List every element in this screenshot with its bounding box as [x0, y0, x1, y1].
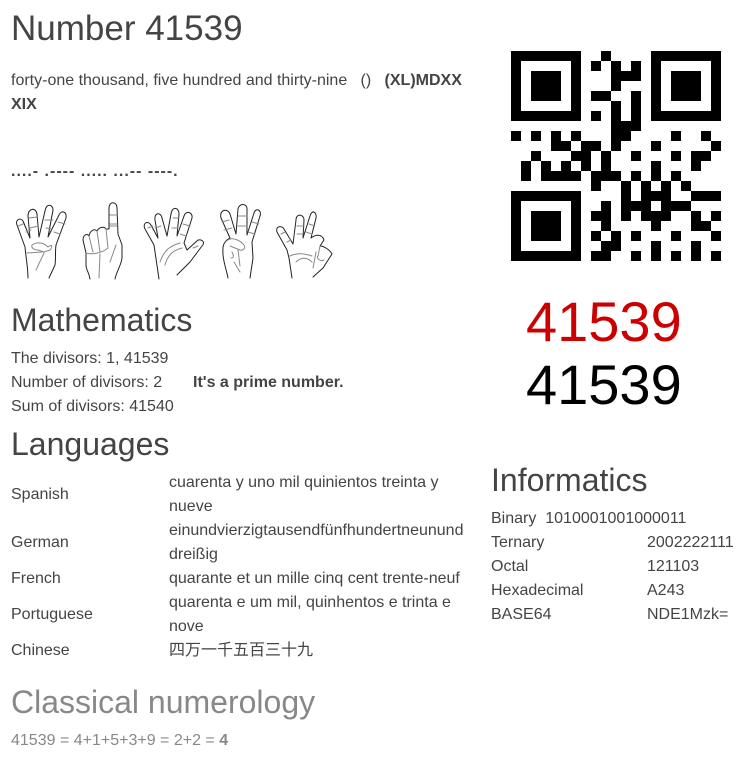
- Spanish row: nueve: [169, 498, 213, 515]
- large red number: 41539: [526, 290, 682, 353]
- Chinese row: 四万一千五百三十九: [169, 642, 313, 659]
- Chinese row: [11, 641, 313, 659]
- number in words and roman numeral: [11, 72, 462, 113]
- octal: 121103: [647, 558, 699, 575]
- octal: [491, 558, 699, 575]
- QR code: [511, 51, 721, 261]
- French row: French: [11, 570, 61, 587]
- heading: Languages: Languages: [11, 426, 169, 462]
- heading: Informatics: Informatics: [491, 462, 647, 498]
- binary: Binary 1010001001000011: [491, 510, 686, 527]
- Portuguese row: quarenta e um mil, quinhentos e trinta e: [169, 594, 451, 611]
- morse code: ....- .---- ..... ...-- ----.: [11, 163, 179, 180]
- icon: hand showing 3: [221, 204, 260, 278]
- mathematics facts: Sum of divisors: 41540: [11, 398, 174, 415]
- mathematics facts: Number of divisors: 2: [11, 374, 162, 391]
- numerology calculation: 41539 = 4+1+5+3+9 = 2+2 = 4: [11, 732, 228, 749]
- German row: dreißig: [169, 546, 218, 563]
- Portuguese row: Portuguese: [11, 606, 93, 623]
- title: Number 41539: [11, 9, 243, 48]
- German row: German: [11, 534, 69, 551]
- ternary: Ternary: [491, 534, 544, 551]
- ternary: [491, 534, 734, 551]
- Spanish row: cuarenta y uno mil quinientos treinta y: [169, 474, 438, 491]
- sign language hands: [16, 202, 332, 280]
- icon: hand showing 9: [277, 212, 332, 278]
- informatics table: [491, 510, 734, 623]
- hexadecimal: [491, 582, 684, 599]
- Portuguese row: nove: [169, 618, 204, 635]
- ternary: 2002222111: [647, 534, 734, 551]
- number in words and roman numeral: XIX: [11, 96, 37, 113]
- base64: BASE64: [491, 606, 551, 623]
- icon: hand showing 5: [144, 208, 203, 279]
- octal: Octal: [491, 558, 528, 575]
- mathematics facts: The divisors: 1, 41539: [11, 350, 168, 367]
- mathematics facts: [11, 350, 344, 415]
- base64: NDE1Mzk=: [647, 606, 728, 623]
- base64: [491, 606, 728, 623]
- Spanish row: Spanish: [11, 486, 69, 503]
- Portuguese row: [11, 594, 451, 635]
- Chinese row: Chinese: [11, 642, 70, 659]
- languages table: [11, 474, 463, 659]
- hexadecimal: A243: [647, 582, 684, 599]
- large black number: 41539: [526, 353, 682, 416]
- hexadecimal: Hexadecimal: [491, 582, 583, 599]
- German row: [11, 522, 463, 563]
- German row: einundvierzigtausendfünfhundertneunund: [169, 522, 463, 539]
- prime number note: It's a prime number.: [193, 374, 344, 391]
- French row: [11, 570, 460, 587]
- heading: Mathematics: Mathematics: [11, 302, 192, 338]
- Spanish row: [11, 474, 438, 515]
- French row: quarante et un mille cinq cent trente-neuf: [169, 570, 460, 587]
- icon: hand showing 4: [17, 205, 66, 278]
- icon: hand showing 1: [83, 203, 122, 279]
- number in words and roman numeral: forty-one thousand, five hundred and thirty-nine () (XL)MDXX: [11, 72, 462, 89]
- heading: Classical numerology: Classical numerology: [11, 684, 315, 720]
